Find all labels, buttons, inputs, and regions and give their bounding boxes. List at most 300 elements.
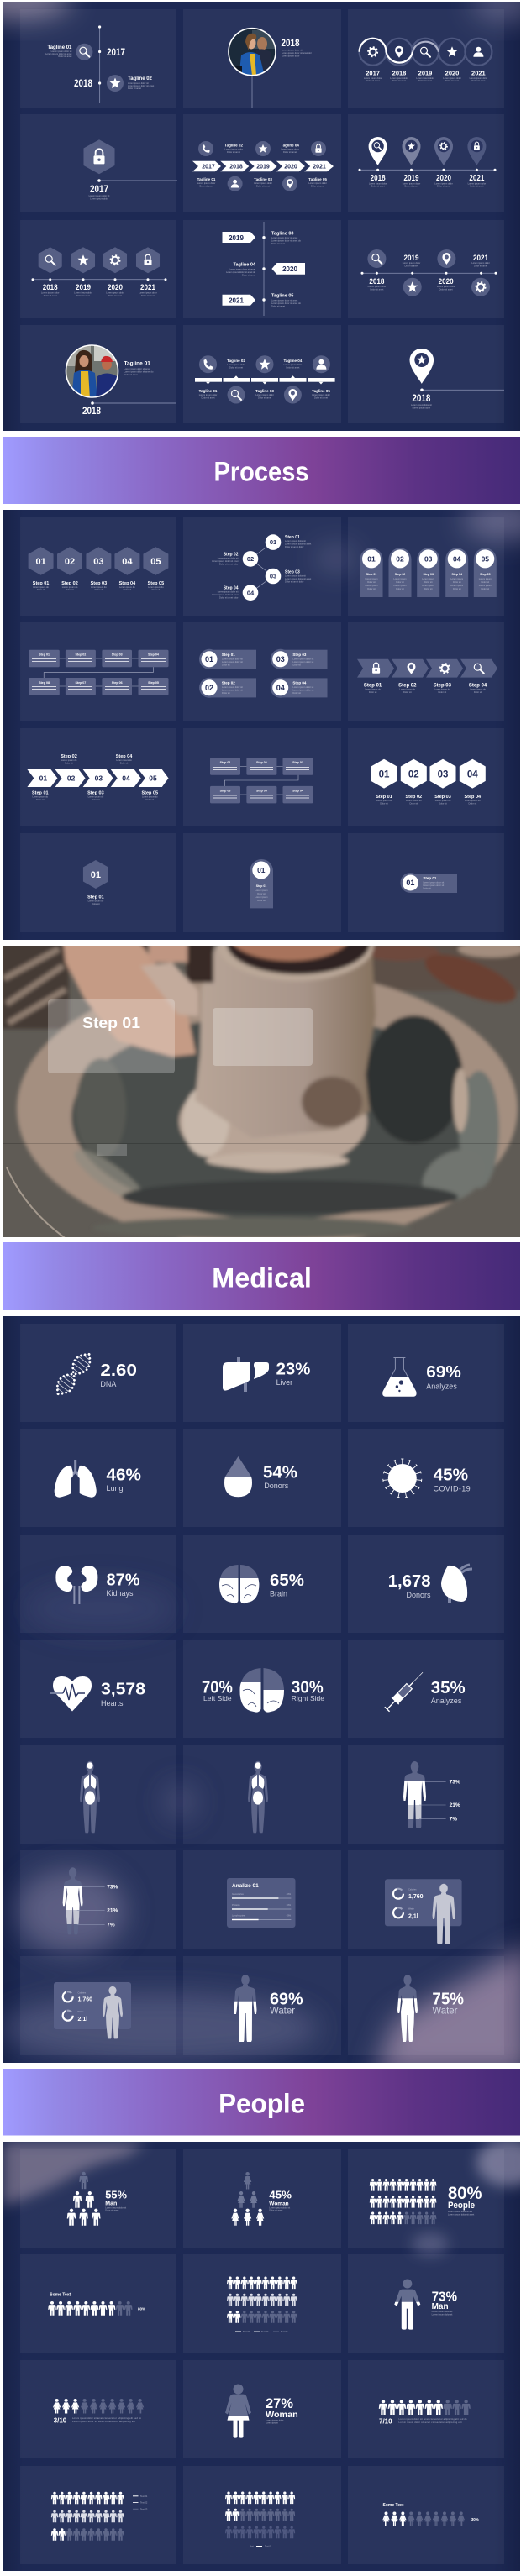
pill 05: [474, 548, 497, 597]
labels: [376, 795, 482, 805]
card 01: Step 01: [222, 653, 235, 657]
ratio: 3/10: [54, 2417, 67, 2425]
section: medical slides: [0, 1316, 521, 2075]
stat: 45% COVID-19: [434, 1466, 471, 1493]
panel: alternating timeline: [348, 220, 504, 318]
panel: team photo 2018: [20, 325, 176, 423]
step labels: Dolor sit: [369, 690, 377, 694]
taglines: Tagline 03: [271, 231, 294, 236]
card: Calories: [408, 1888, 417, 1891]
card 04: Dolor sit: [292, 691, 301, 695]
chevrons: [357, 659, 497, 678]
numbers: 04: [122, 557, 133, 567]
flow boxes: [210, 758, 313, 803]
tagline 02: [128, 76, 155, 90]
stat: 75% Water: [432, 1991, 464, 2017]
stat: 87% Kidnays: 87%: [106, 1571, 140, 1589]
pill 01: Step 01: [366, 573, 376, 576]
panel: photo milestone 2018: [183, 9, 341, 108]
labels: Dolor sit: [36, 798, 45, 801]
labels: Lorem ipsum do: [116, 758, 132, 762]
heading: Some Text: [383, 2503, 404, 2508]
box labels: Step 03: [292, 761, 303, 764]
panel: male calories card: [348, 1850, 504, 1949]
panel: three-row grid with legend: [183, 2254, 341, 2353]
panel: analyzes flask: [348, 1324, 504, 1422]
pill 04: Dolor sit: [453, 580, 461, 584]
card: [400, 873, 457, 893]
percent labels: [107, 1885, 118, 1928]
stat: 73% Man: [432, 2290, 457, 2316]
taglines: Lorem ipsum dolor sit amet do: [271, 302, 301, 305]
hexagons: [371, 759, 486, 789]
stat: 46% Lung: 46%: [106, 1466, 141, 1485]
panel: grid with side legend: [20, 2466, 176, 2564]
pill 04: Lorem ipsum: [450, 584, 463, 587]
card: Lorem ipsum dolor sit: [423, 884, 444, 887]
stat: 35% Analyzes: [431, 1679, 466, 1705]
labels: Lorem ipsum dolor sit amet: [212, 559, 239, 563]
panel: male water: [183, 1956, 341, 2055]
numbers: 03: [93, 557, 104, 567]
panel: white chevron steps: [20, 728, 176, 826]
stat: 1,678 Donors: 1,678: [388, 1572, 430, 1591]
card: Analize 01: Glucocortes: [232, 1892, 245, 1896]
labels: Dolor sit amet dolor: [285, 580, 304, 583]
tagline: Tagline 01: [124, 361, 150, 367]
figure: male organs: [248, 1761, 268, 1833]
taglines: Lorem ipsum dolor: [197, 181, 215, 185]
icons: [198, 141, 326, 191]
panel: kidneys: [20, 1535, 176, 1633]
taglines: Tagline 04: [284, 359, 303, 363]
taglines: Tagline 03: [254, 177, 272, 181]
card 03: 03: [276, 655, 285, 664]
captions: Dolor sit amet: [445, 79, 459, 82]
numbers: 02: [67, 774, 76, 783]
card 02: 02: [205, 684, 213, 692]
box labels: Step 06: [112, 681, 123, 685]
tagline 01: Tagline 01: [47, 45, 72, 50]
photo: woman at desk: [228, 27, 276, 76]
glass card: Step 01: [48, 999, 175, 1073]
labels: Dolor sit: [439, 801, 447, 805]
step labels: Lorem ipsum do: [62, 585, 78, 589]
legend: Text 01: [243, 2330, 250, 2333]
card 02: Dolor sit: [222, 691, 230, 695]
stat: 46% Lung: [106, 1466, 141, 1493]
year: [89, 183, 110, 200]
box labels: Step 05: [148, 681, 159, 685]
percent labels: 73%: [107, 1885, 118, 1891]
icons: [367, 249, 490, 296]
people row: [48, 2301, 133, 2316]
step labels: Step 04: [469, 684, 487, 689]
card: Calories: [77, 1991, 87, 1994]
panel: vertical timeline with arrow tags: 2019: [229, 234, 244, 242]
pill: 01: [257, 866, 266, 874]
box labels: Step 03: [112, 653, 123, 657]
step labels: Step 01: [33, 581, 49, 586]
panel: hexagon icon timeline: [20, 220, 176, 318]
card: Analize 01: Analize 01: [232, 1883, 259, 1889]
taglines: Dolor sit amet: [286, 366, 300, 370]
labels: Lorem ipsum dolor sit amet: [212, 593, 239, 596]
card 01: Dolor sit: [222, 664, 230, 667]
pill 04: Lorem ipsum: [450, 577, 463, 580]
taglines: Lorem ipsum dolor: [308, 181, 327, 185]
labels: Step 02: [224, 552, 239, 557]
taglines: Tagline 03: [255, 389, 274, 393]
ratio: Lorem ipsum dolor sit amet consectetur adipiscing elit sed do: [72, 2416, 142, 2420]
section: people slides: [3, 2139, 521, 2571]
taglines: Dolor sit amet: [202, 396, 215, 400]
pill 02: Step 02: [395, 573, 405, 576]
tagline: Lorem ipsum dolor sit amet do: [124, 370, 154, 373]
panel: map pins timeline: Lorem ipsum dolor: [369, 181, 387, 185]
people grid: [51, 2492, 124, 2541]
panel: hexagon icon timeline: Lorem ipsum dolor: [106, 291, 124, 294]
box labels: Step 08: [39, 681, 50, 685]
labels: Lorem ipsum dolor sit: [218, 556, 239, 559]
label: Lorem ipsum do: [88, 899, 104, 902]
step labels: Step 02: [61, 581, 78, 586]
panel: looping rings timeline: [348, 9, 504, 108]
card 03: Dolor sit: [292, 664, 301, 667]
icon: star: [107, 75, 124, 92]
taglines: Dolor sit amet: [258, 396, 271, 400]
tagline 01: Lorem ipsum dolor sit: [51, 50, 72, 53]
hexagons: [39, 247, 160, 273]
chevron years: 2017: [202, 165, 215, 171]
pill 02: Dolor sit: [396, 587, 404, 590]
taglines: [199, 359, 330, 400]
icon: lock hexagon: [83, 139, 115, 174]
men row: [379, 2400, 471, 2415]
figure: large woman: [225, 2384, 251, 2438]
figure: female organs: [80, 1761, 100, 1833]
labels: Step 04: [224, 585, 239, 590]
panel: vertical timeline with arrow tags: [183, 220, 341, 318]
labels: Lorem ipsum dolor sit amet: [285, 577, 312, 580]
labels: Step 03: [87, 791, 104, 796]
labels: Step 04: [116, 754, 133, 759]
card: Step 01: [423, 876, 437, 880]
captions: Lorem ipsum dolor: [364, 76, 382, 80]
taglines: Dolor sit amet: [283, 150, 297, 154]
captions: Lorem ipsum dolor: [470, 76, 487, 80]
stat: 54% Donors: 54%: [263, 1463, 297, 1482]
chevron years: 2021: [313, 165, 326, 171]
pill 04: 04: [453, 554, 461, 563]
stat: 55% Man: Man: [105, 2201, 117, 2206]
card 02: Step 02: [222, 680, 235, 685]
labels: Step 01: [376, 795, 392, 800]
step labels: Dolor sit: [95, 588, 103, 591]
card: 01: [406, 879, 414, 887]
panel: 30% single row: [348, 2466, 504, 2564]
card 03: [271, 649, 328, 669]
figure: female water level: [397, 1975, 418, 2042]
taglines: Lorem ipsum dolor: [284, 363, 302, 366]
panel: female body stats: [20, 1850, 176, 1949]
step labels: Lorem ipsum do: [470, 687, 486, 690]
panel: map pins timeline: Lorem ipsum dolor: [434, 181, 453, 185]
pill 01: Lorem ipsum: [365, 577, 378, 580]
legend: Text 03: [281, 2330, 288, 2333]
card: Analize 01: Lymphocytes: [232, 1913, 245, 1917]
numbers: 05: [150, 557, 161, 567]
panel: left and right brain: [183, 1640, 341, 1738]
labels: Dolor sit: [92, 798, 100, 801]
ratio: Lorem ipsum dolor sit amet consectetur adipiscing elit sed do: [398, 2417, 467, 2421]
year labels: 2021: [471, 69, 486, 77]
chevrons: [192, 161, 334, 171]
pill 05: Lorem ipsum: [479, 577, 492, 580]
numbers: 01: [39, 774, 47, 783]
nodes: 02: [247, 555, 254, 563]
panel: icon chevron steps: [348, 622, 504, 721]
ratio: [379, 2417, 467, 2426]
captions: Dolor sit amet: [418, 79, 432, 82]
panel: chevron timeline with icons: [183, 114, 341, 212]
box labels: Step 06: [220, 790, 230, 793]
taglines: Dolor sit amet: [256, 185, 270, 188]
pill 04: Step 04: [451, 573, 462, 576]
pill 04: Dolor sit: [453, 587, 461, 590]
pill 05: Lorem ipsum: [479, 584, 492, 587]
nodes: 04: [247, 589, 255, 596]
numbers: 03: [95, 774, 103, 783]
panel: single card step: [348, 833, 504, 932]
years: [369, 254, 489, 286]
pill 03: Dolor sit: [424, 587, 433, 590]
stat: 45% Woman: Lorem ipsum dolor sit: [269, 2206, 290, 2209]
stat: 35% Analyzes: 35%: [431, 1679, 466, 1697]
glass card: Step 01: Step 01: [82, 1015, 140, 1031]
stat: 80% People: [448, 2184, 482, 2216]
card 04: Lorem ipsum dolor sit: [292, 685, 313, 689]
stat: 55% Man: [105, 2189, 127, 2212]
pill 02: Dolor sit: [396, 580, 404, 584]
figure: male body fill: [403, 1761, 426, 1828]
taglines: [226, 231, 301, 307]
icons: [368, 46, 483, 58]
step labels: Step 04: [119, 581, 136, 586]
year labels: 2020: [445, 69, 459, 77]
box labels: Step 05: [256, 790, 267, 793]
stat: 35% Analyzes: Analyzes: [431, 1697, 462, 1705]
numbers: [35, 557, 161, 567]
pill 04: [445, 548, 468, 597]
taglines: Lorem ipsum dolor: [281, 148, 299, 151]
panel: white hexagon steps: [348, 728, 504, 826]
stat: 73% Man: Lorem ipsum dolor sit: [432, 2310, 453, 2313]
taglines: Dolor sit amet: [200, 185, 213, 188]
year and text: [281, 37, 312, 57]
labels: Dolor sit: [120, 761, 129, 764]
pill: Dolor sit: [257, 892, 266, 895]
chevron years: [202, 165, 326, 171]
card: [385, 1879, 462, 1926]
stat: 69% Analyzes: Analyzes: [426, 1382, 457, 1390]
percent labels: 7%: [450, 1817, 457, 1823]
step labels: Lorem ipsum do: [91, 585, 107, 589]
labels: Lorem ipsum do: [376, 799, 392, 802]
step labels: Step 03: [91, 581, 107, 586]
year and text: Lorem ipsum dolor sit: [282, 49, 303, 52]
stat: 54% Donors: Donors: [264, 1482, 289, 1490]
stat: 27% Woman: Lorem ipsum: [266, 2421, 278, 2424]
panel: hexagon icon timeline: Lorem ipsum dolor: [139, 291, 157, 294]
panel: 80% single row: [20, 2254, 176, 2353]
stat: 55% Man: Lorem ipsum dolor sit: [105, 2206, 126, 2209]
hexagon: [83, 860, 108, 889]
year 2017: 2017: [107, 46, 125, 58]
years: 2018: [369, 277, 384, 286]
icon: pin: [410, 349, 434, 384]
labels: Step 02: [406, 795, 422, 800]
panel: six-box flow: [183, 728, 341, 826]
years: 2021: [473, 254, 489, 263]
pill 03: Dolor sit: [424, 580, 433, 584]
box labels: Step 04: [292, 790, 303, 793]
tagline: Dolor sit amet: [124, 373, 138, 376]
panel: hexagon icon timeline: Lorem ipsum dolor: [74, 291, 92, 294]
people pyramid: [231, 2172, 264, 2226]
hexagon: 01: [91, 870, 101, 880]
taglines: Dolor sit amet: [271, 242, 285, 245]
labels: Dolor sit: [146, 798, 154, 801]
panel: five tall pills: [348, 517, 504, 616]
labels: Lorem ipsum dolor sit: [285, 539, 306, 543]
stat: 45% Woman: 45%: [269, 2189, 292, 2201]
stat: 2.60 DNA: [100, 1361, 137, 1388]
card 04: 04: [276, 684, 285, 692]
panel: analysis card: [183, 1850, 341, 1949]
step labels: Dolor sit: [439, 690, 446, 694]
legend: Text 02: [140, 2501, 148, 2505]
step labels: Lorem ipsum do: [434, 687, 450, 690]
labels: Dolor sit amet dolor: [219, 596, 239, 600]
label: Step 01: [87, 895, 104, 900]
nodes: 01: [270, 538, 276, 546]
section: process slides: [3, 502, 521, 940]
tagline 01: [45, 45, 72, 58]
year: Lorem ipsum dolor: [90, 197, 108, 200]
chevron years: 2020: [284, 165, 297, 171]
step labels: Dolor sit: [474, 690, 482, 694]
panel: zig-zag nodes: [183, 517, 341, 616]
year: Lorem ipsum dolor: [413, 407, 430, 410]
tagline 02: Tagline 02: [128, 76, 153, 81]
years: 2018: [43, 283, 58, 292]
step labels: Dolor sit: [37, 588, 45, 591]
icon: syringe: [383, 1669, 426, 1713]
percent labels: 21%: [450, 1802, 460, 1808]
year: Lorem ipsum dolor sit: [89, 194, 110, 197]
card 03: Lorem ipsum dolor sit: [292, 660, 313, 664]
step labels: Dolor sit: [124, 588, 131, 591]
percent: 30%: [471, 2517, 479, 2521]
card 02: [199, 678, 256, 698]
card: Dolor sit: [423, 887, 431, 890]
labels: Step 04: [465, 795, 482, 800]
stat: 70% Left Side: 70%: [202, 1678, 233, 1697]
panel: 80% people grid: [348, 2149, 504, 2248]
pill 05: Dolor sit: [482, 580, 489, 584]
ribbon bar: [195, 375, 335, 385]
labels: Lorem ipsum do: [61, 758, 77, 762]
legend: [235, 2330, 288, 2333]
card 04: Lorem ipsum dolor sit: [292, 689, 313, 692]
panel: hexagon icon timeline: Dolor sit amet: [44, 294, 57, 297]
legend: Text 01: [265, 2545, 272, 2548]
stat: 65% Brain: 65%: [270, 1571, 304, 1590]
captions: [364, 76, 487, 82]
taglines: Lorem ipsum dolor: [224, 148, 243, 151]
captions: Dolor sit amet: [366, 79, 380, 82]
labels: Dolor sit: [469, 801, 476, 805]
stat: 55% Man: Dolor sit amet: [105, 2209, 119, 2212]
stat: 2.60 DNA: DNA: [100, 1380, 116, 1388]
panel: map pins timeline: Dolor sit amet: [437, 185, 450, 188]
labels: Step 05: [142, 791, 158, 796]
card: [54, 1982, 131, 2029]
panel: syringe: [348, 1640, 504, 1738]
pill: Dolor sit: [257, 899, 266, 902]
labels: Lorem ipsum dolor sit: [218, 590, 239, 593]
taglines: Tagline 05: [308, 177, 327, 181]
years: [371, 174, 485, 183]
card: Analize 01: Proteins: [232, 1903, 240, 1907]
chevron years: 2018: [229, 165, 243, 171]
icon: search: [76, 44, 92, 60]
panel: single large pin 2018: [348, 325, 504, 423]
tagline: Lorem ipsum dolor sit amet: [124, 367, 150, 370]
stat: 80% People: Lorem ipsum dolor sit am: [448, 2210, 472, 2213]
step labels: Lorem ipsum do: [148, 585, 164, 589]
card: 1,760: [77, 1997, 92, 2003]
hexagons: [29, 547, 168, 575]
stat: 27% Woman: [266, 2395, 298, 2424]
stat: 65% Brain: [270, 1571, 304, 1598]
card: Analize 01: [227, 1878, 296, 1928]
panel: male anatomy: [183, 1745, 341, 1844]
labels: Lorem ipsum do: [406, 799, 422, 802]
years: 2021: [140, 283, 156, 292]
panel: alternating timeline: Lorem ipsum dolor: [437, 285, 455, 288]
numbers: [379, 769, 478, 779]
card: Lorem ipsum dolor sit: [423, 880, 444, 884]
step labels: Dolor sit: [152, 588, 160, 591]
icon: liver: [223, 1357, 269, 1392]
year: 2017: [90, 183, 108, 195]
taglines: Dolor sit amet: [314, 396, 328, 400]
stat: 23% Liver: Liver: [276, 1378, 292, 1387]
step labels: Step 01: [364, 684, 382, 689]
card 02: Lorem ipsum dolor sit: [222, 685, 243, 689]
panel: 3/10 women: [20, 2360, 176, 2458]
box labels: [220, 761, 303, 793]
card 03: Lorem ipsum dolor sit: [292, 657, 313, 660]
panel: grid mostly muted: [183, 2466, 341, 2564]
card: Analize 01: 60%: [287, 1903, 292, 1907]
stat: 45% Woman: [269, 2189, 292, 2212]
pill: Lorem ipsum: [255, 889, 267, 892]
labels: Step 02: [61, 754, 77, 759]
taglines: Lorem ipsum dolor: [312, 393, 330, 396]
